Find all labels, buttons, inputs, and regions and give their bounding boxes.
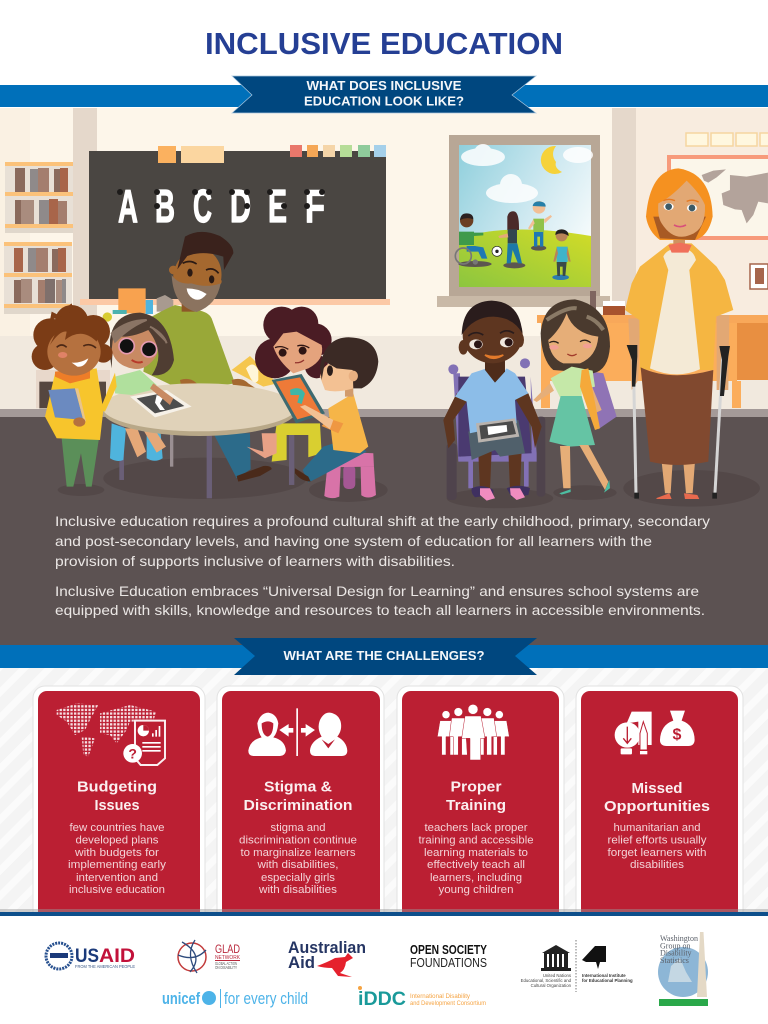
chalkboard <box>80 145 390 305</box>
logo: Australian Aid: Australian <box>288 938 366 957</box>
logo: Washington Group <box>658 932 708 1006</box>
male teacher <box>143 232 272 482</box>
description: with budgets for <box>74 847 159 859</box>
logo: Open Society Foundations <box>410 942 487 970</box>
description: developed plans <box>76 834 159 846</box>
logo: UNESCO IIEP: United Nations <box>543 973 571 978</box>
ribbon banner <box>234 638 537 675</box>
playing children <box>455 201 571 280</box>
description <box>418 822 534 896</box>
logo: IDDC <box>358 986 486 1010</box>
floor <box>0 417 768 645</box>
heading: Budgeting <box>77 778 157 796</box>
world map poster <box>669 157 768 238</box>
icon: man and woman separated <box>248 708 347 756</box>
intro text: Inclusive Education embraces “Universal Design for Learning” and ensures school systems are <box>55 583 699 599</box>
top ribbon band <box>0 76 768 113</box>
sun <box>541 146 562 174</box>
heading: Stigma & <box>264 778 332 796</box>
description: effectively teach all <box>427 859 525 871</box>
ribbon heading: WHAT DOES INCLUSIVE <box>306 78 462 93</box>
flash card <box>232 356 277 387</box>
heading: Proper <box>450 778 502 796</box>
intro text: Inclusive education requires a profound cultural shift at the early childhood, primary, secondary <box>55 513 710 529</box>
logo: UNESCO IIEP <box>521 940 633 992</box>
ribbon heading: EDUCATION LOOK LIKE? <box>304 94 464 108</box>
logo: GLAD Network <box>178 940 240 973</box>
intro text <box>55 513 710 618</box>
logo: Open Society Foundations: OPEN SOCIETY <box>410 942 487 957</box>
logo: UNICEF <box>162 989 308 1008</box>
description: few countries have <box>70 822 164 834</box>
logo: Australian Aid <box>288 938 366 977</box>
icon: dotted world map and report <box>57 703 165 765</box>
title: INCLUSIVE EDUCATION <box>205 26 563 61</box>
girl with bag <box>533 299 617 495</box>
description: relief efforts usually <box>608 834 707 846</box>
heading <box>244 778 352 814</box>
icon: group of people <box>437 704 509 760</box>
table group figures <box>32 232 388 502</box>
girl with curly hair <box>255 307 332 378</box>
ribbon heading: WHAT ARE THE CHALLENGES? <box>284 648 485 663</box>
description: forget learners with <box>608 847 706 859</box>
description: with disabilities, <box>256 859 338 871</box>
description: stigma and <box>270 822 326 834</box>
wall <box>0 108 768 417</box>
small cabinet <box>36 370 110 408</box>
boy with tablet <box>272 337 378 483</box>
logo: USAID <box>46 943 135 970</box>
logo: IDDC: iDDC <box>358 989 406 1010</box>
table top <box>102 383 296 436</box>
heading <box>446 778 506 814</box>
logo: IDDC: International Disability <box>410 993 471 1000</box>
logo: Washington Group: Group on <box>660 942 690 950</box>
logo: UNICEF: unicef <box>162 989 200 1008</box>
heading: Missed <box>632 780 682 797</box>
heading <box>77 778 157 814</box>
window <box>437 135 610 307</box>
description: learning materials to <box>424 847 528 859</box>
braille alphabet: C <box>193 180 212 232</box>
logo: UNESCO IIEP: for Educational Planning <box>582 978 633 983</box>
description: intervention and <box>76 872 158 884</box>
small picture frame <box>750 264 768 289</box>
description: to marginalize learners <box>240 847 356 859</box>
challenges ribbon band <box>0 638 768 675</box>
description: discrimination continue <box>239 834 357 846</box>
footer <box>0 909 768 1024</box>
blue chair and glasses girl legs <box>110 423 166 461</box>
braille alphabet: A <box>118 180 138 232</box>
description: especially girls <box>261 872 336 884</box>
bookshelves <box>4 162 73 314</box>
description: humanitarian and <box>614 822 700 834</box>
braille alphabet: B <box>155 180 175 232</box>
ribbon heading <box>304 78 464 108</box>
challenges background <box>0 668 768 913</box>
logo: USAID: AID <box>99 946 135 967</box>
description <box>239 822 357 896</box>
description: implementing early <box>68 859 167 871</box>
crutches <box>627 345 730 499</box>
table legs <box>119 425 294 498</box>
glasses girl <box>110 313 174 405</box>
logo: USAID: FROM THE AMERICAN PEOPLE <box>75 964 135 970</box>
intro text: equipped with skills, knowledge and resources to teach all learners in accessible environments. <box>55 602 705 618</box>
description: learners, including <box>430 872 522 884</box>
yellow chair and curly girl legs <box>247 423 322 462</box>
icon: bulb, pencil and money bag <box>615 711 695 754</box>
heading <box>604 780 710 815</box>
heading: Training <box>446 797 506 814</box>
description <box>608 822 707 871</box>
icon: bulb, pencil and money bag: $ <box>673 726 682 743</box>
logo: IDDC: and Development Consortium <box>410 1000 486 1007</box>
description: training and accessible <box>418 834 534 846</box>
braille alphabet <box>117 180 325 232</box>
logo: Washington Group: Disability <box>660 948 692 958</box>
logo: Washington Group: Washington <box>660 934 698 943</box>
logo: GLAD Network: GLOBAL ACTION <box>215 961 237 966</box>
floor shadows <box>447 470 760 508</box>
logo: UNESCO IIEP: Educational, Scientific and <box>521 978 572 983</box>
braille alphabet: E <box>268 180 287 232</box>
logo: GLAD Network: ON DISABILITY <box>215 965 237 970</box>
decorative wall strip <box>686 133 768 146</box>
braille alphabet: F <box>305 180 325 232</box>
intro text: provision of supports inclusive of learners with disabilities. <box>55 553 455 569</box>
logo: UNESCO IIEP: International Institute <box>582 973 626 978</box>
right group figures <box>443 168 760 508</box>
tactile tablet <box>130 390 192 417</box>
description: with disabilities <box>258 884 338 896</box>
heading: Discrimination <box>244 797 352 814</box>
panel: stigma and discrimination <box>217 686 384 926</box>
boy in wheelchair <box>443 301 545 501</box>
classroom illustration <box>0 108 768 645</box>
teacher's desk <box>537 291 768 408</box>
intro text: and post-secondary levels, and having one system of education for all learners with the <box>55 533 652 549</box>
curly-haired child with book <box>32 303 117 487</box>
description: young children <box>438 884 514 896</box>
logo: GLAD Network: NETWORK <box>215 955 240 961</box>
logo: Washington Group: Statistics <box>660 956 689 965</box>
logo: UNICEF: for every child <box>224 989 308 1008</box>
heading: Opportunities <box>604 798 710 815</box>
classroom clutter <box>103 288 173 322</box>
description: disabilities <box>630 859 685 871</box>
woman with crutches <box>625 168 733 499</box>
panel: budgeting issues <box>33 686 205 926</box>
logo: Open Society Foundations: FOUNDATIONS <box>410 956 487 970</box>
description: teachers lack proper <box>424 822 528 834</box>
logo: USAID: US <box>75 946 99 967</box>
ribbon banner <box>232 76 536 113</box>
braille alphabet: D <box>230 180 251 232</box>
logo: Australian Aid: Aid <box>288 953 315 972</box>
description: inclusive education <box>69 884 165 896</box>
pink stool <box>324 453 376 498</box>
floor shadows <box>58 458 388 502</box>
logo: UNESCO IIEP: Cultural Organization <box>531 983 572 988</box>
heading: Issues <box>94 797 140 814</box>
description <box>68 822 167 896</box>
logo: GLAD Network: GLAD <box>215 942 240 956</box>
icon: dotted world map and report: ? <box>128 745 137 761</box>
panel: missed opportunities <box>576 686 743 926</box>
panel: proper training <box>397 686 564 926</box>
